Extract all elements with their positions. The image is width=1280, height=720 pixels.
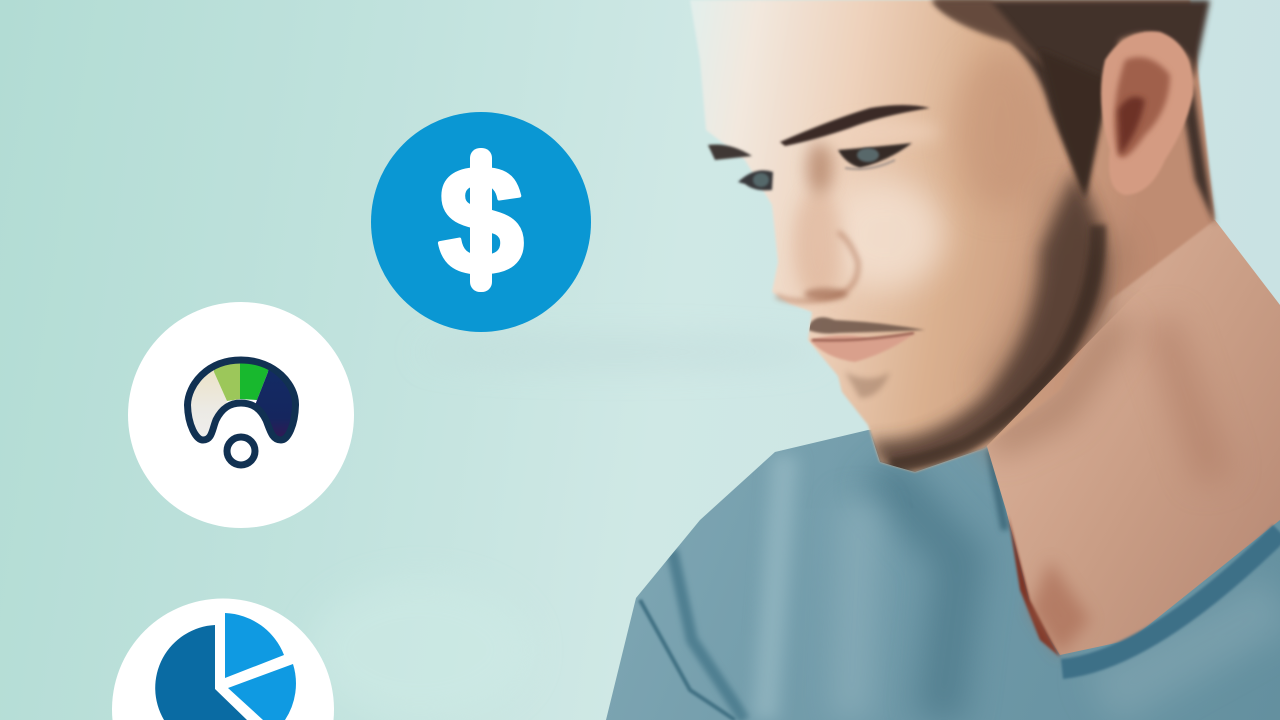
photo: face [690, 0, 1215, 472]
icon: gauge badge [128, 302, 354, 528]
icon: dollar badge [371, 112, 591, 332]
gauge segments [191, 364, 292, 436]
eyebrow left [708, 144, 752, 160]
brow shadow at nose bridge [807, 142, 833, 194]
photo: t-shirt [606, 420, 1280, 720]
eye right [838, 143, 912, 168]
eyebrow right [780, 105, 930, 146]
lips [810, 333, 915, 362]
nose shading [776, 232, 858, 301]
beard shadow [976, 189, 1130, 390]
icon: pie chart badge [112, 598, 334, 720]
t-shirt collar [1062, 532, 1280, 669]
gauge outline [188, 360, 296, 440]
photo: ear [1101, 32, 1193, 195]
chin patch [845, 372, 890, 398]
icon: dollar badge: $ [438, 134, 524, 307]
photo: hair [932, 0, 1215, 225]
upper pie slice [225, 613, 284, 678]
right pie slice [228, 664, 296, 720]
photo: neck [985, 190, 1280, 669]
eye left [738, 170, 773, 190]
moustache [808, 317, 925, 334]
gauge knob [227, 437, 255, 465]
large pie slice [155, 625, 247, 720]
